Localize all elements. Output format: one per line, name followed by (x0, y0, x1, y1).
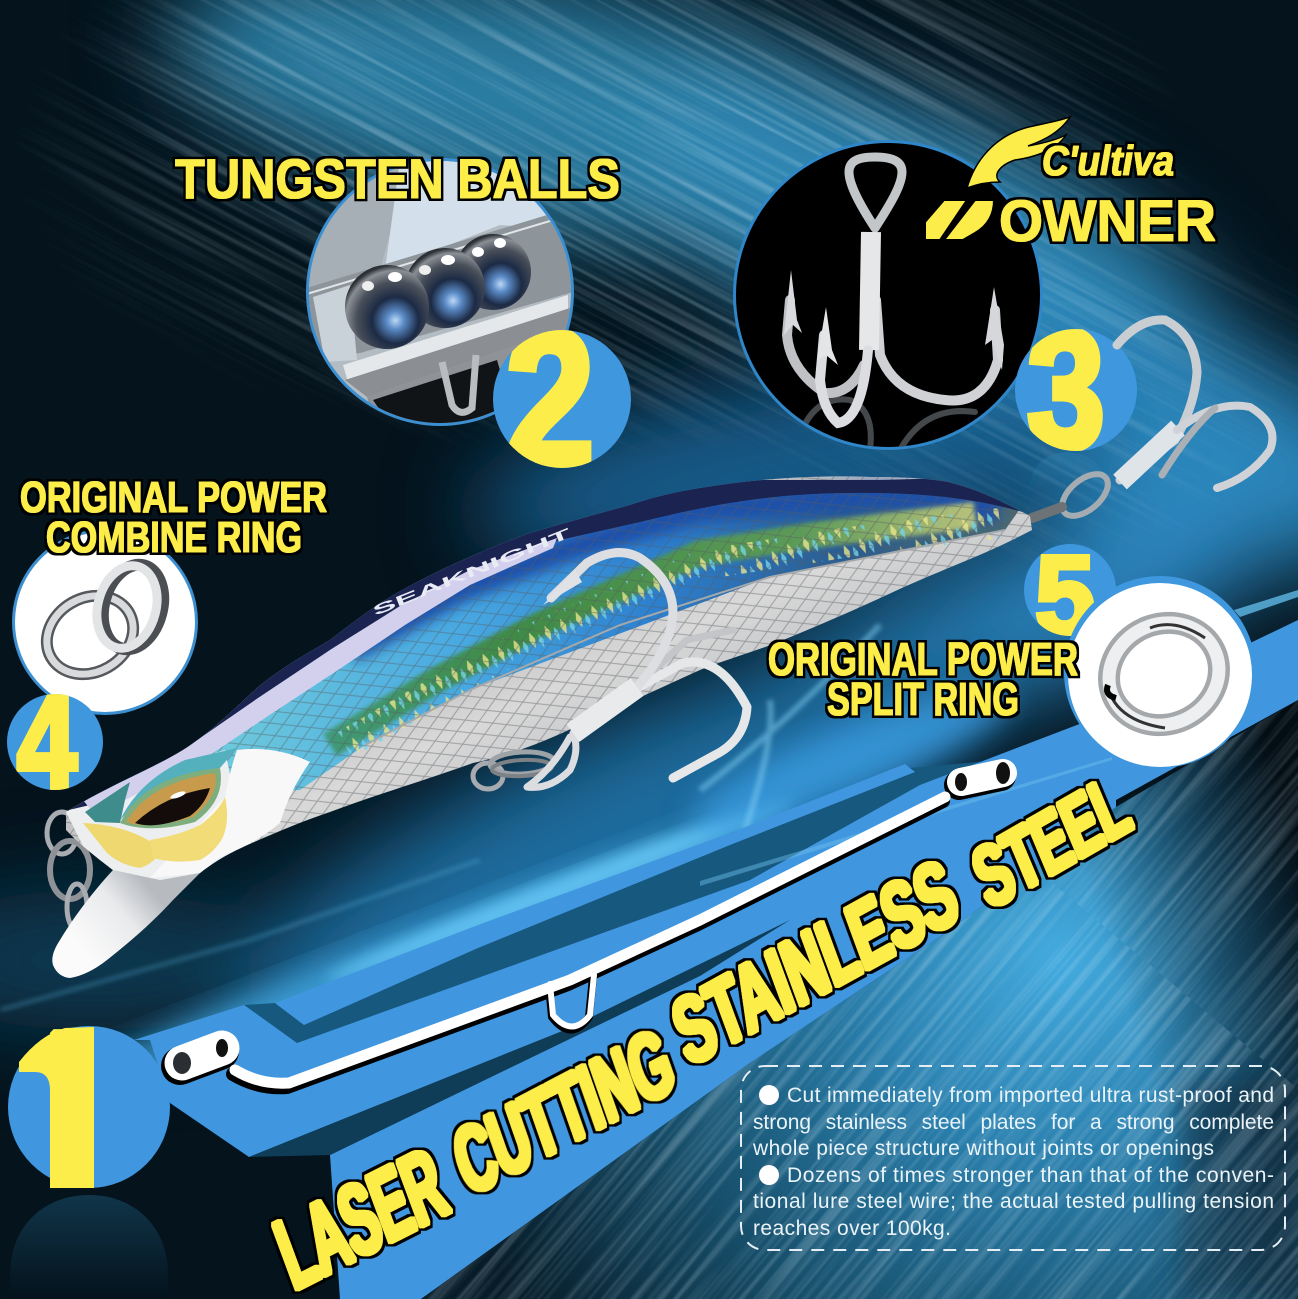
centre point (820, 335, 868, 423)
belly hook (473, 553, 747, 789)
body (40, 460, 1050, 890)
dark chevron gap (244, 760, 1000, 1043)
callout: dashed description box (741, 1066, 1285, 1250)
blue chevron bands (134, 590, 1298, 1299)
number badge 4: 4 (17, 665, 77, 817)
barbs (784, 270, 802, 335)
head teal patch (120, 748, 237, 820)
callout: dashed description box: tional lure steel wire; the actual tested pulling tension (753, 1190, 1274, 1213)
number badge 1 (8, 1026, 170, 1188)
logo: Cultiva Owner: C'ultiva (1042, 137, 1174, 184)
bullet 2 (759, 1165, 779, 1185)
wedge (249, 920, 790, 1157)
reflection of 3 (1030, 452, 1106, 490)
steel wire bar (173, 762, 1010, 1087)
headline: laser cutting stainless steel (263, 757, 1142, 1299)
number badge 2 (493, 330, 631, 468)
pupil (135, 788, 210, 825)
swoosh lines (700, 625, 880, 830)
callout: dashed description box: reaches over 100kg. (753, 1217, 951, 1240)
lower band (330, 770, 1116, 1299)
callout: dashed description box: strong stainless steel plates for a strong complete (753, 1111, 1274, 1134)
logo: Cultiva Owner: OWNER (999, 189, 1216, 254)
green band (330, 515, 975, 745)
number badge 1: 1 (19, 981, 99, 1235)
eye (849, 157, 902, 228)
nose snout (83, 823, 158, 868)
shank + right point (876, 300, 998, 400)
reflection of 1 (10, 1195, 168, 1299)
lure (40, 320, 1272, 978)
light stripe (700, 757, 1112, 886)
headline: laser cutting stainless steel: CUTTING (442, 1009, 686, 1216)
head base (60, 750, 245, 880)
title: tungsten balls: TUNGSTEN BALLS (175, 147, 620, 210)
callout: dashed description box: Cut immediately from imported ultra rust-proof and (787, 1084, 1274, 1107)
eye ring (120, 768, 221, 828)
lateral line (365, 530, 1005, 745)
label: combine ring (20, 473, 327, 562)
tail hook (1032, 320, 1272, 524)
nose teal (85, 782, 130, 823)
cheek (150, 797, 227, 862)
scales (40, 460, 1050, 890)
lip (52, 870, 200, 978)
circle 4 photo: combine ring (12, 529, 198, 715)
number badge 4 (7, 694, 103, 790)
lavender stripe (83, 538, 557, 815)
back colour (80, 480, 1040, 800)
number badge 2: 2 (505, 289, 595, 508)
bullet 1 (759, 1085, 779, 1105)
circle 5 badge: 5 (1035, 533, 1095, 658)
navy back (60, 478, 1032, 812)
callout: dashed description box: Dozens of times stronger than that of the conven- (787, 1164, 1274, 1187)
number badge 3: 3 (1027, 295, 1105, 485)
hook tip (543, 570, 582, 605)
reflection (800, 399, 975, 450)
upper stripe (275, 764, 915, 1025)
label: split ring: ORIGINAL POWER (768, 633, 1078, 685)
label: split ring: SPLIT RING (827, 673, 1019, 725)
label: combine ring: COMBINE RING (46, 513, 302, 562)
nose rings (47, 812, 90, 930)
textured lower-right panel (421, 700, 1298, 1299)
headline: laser cutting stainless steel: STEEL (961, 757, 1142, 927)
circle 5 badge (1024, 544, 1116, 636)
photo circle: treble hook (733, 140, 1043, 450)
headline: laser cutting stainless steel: STAINLESS (660, 838, 970, 1086)
photo circle: split ring (1064, 576, 1256, 768)
gill plate (150, 749, 310, 878)
number badge 3 (1015, 329, 1137, 451)
photo circle: tungsten balls (306, 158, 574, 426)
main band (134, 620, 1298, 1157)
left point (787, 300, 864, 393)
label: combine ring: ORIGINAL POWER (20, 473, 327, 522)
owner mark (925, 200, 994, 240)
logo: Cultiva Owner (925, 117, 1216, 254)
callout: dashed description box: whole piece structure without joints or openings (752, 1137, 1214, 1160)
flame mark (967, 117, 1070, 188)
dark blue upper flank (350, 495, 1000, 650)
label: split ring (768, 633, 1078, 725)
body brand text: SEAKNIGHT (370, 524, 574, 619)
